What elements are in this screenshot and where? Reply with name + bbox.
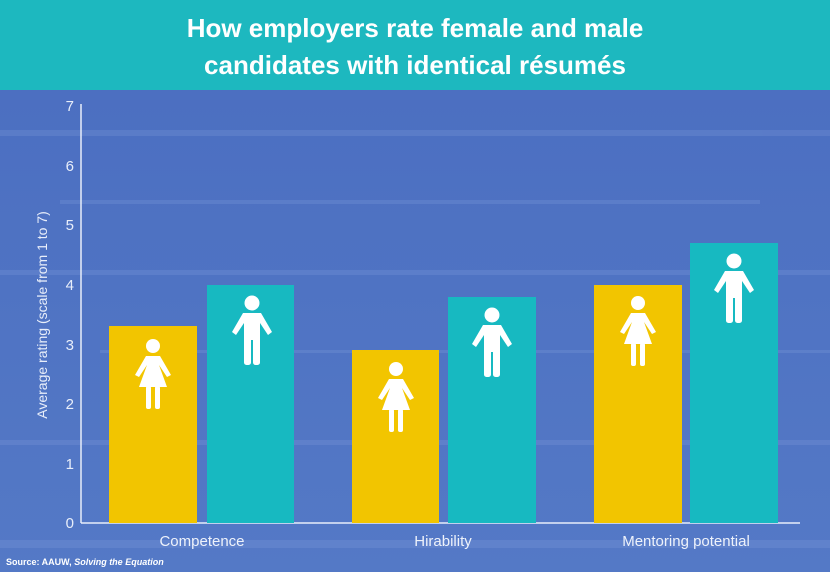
x labels: Hirability <box>414 533 472 550</box>
y axis: 1 <box>66 456 74 473</box>
y axis: 5 <box>66 217 74 234</box>
bars: competence <box>109 285 294 523</box>
y axis: 4 <box>66 277 74 294</box>
y axis: 6 <box>66 158 74 175</box>
y axis: 7 <box>66 98 74 115</box>
x labels: Competence <box>159 533 245 550</box>
y axis <box>34 98 800 532</box>
y axis: 0 <box>66 515 74 532</box>
x labels: Mentoring potential <box>622 533 750 550</box>
y axis: 3 <box>66 337 74 354</box>
y axis: Average rating (scale from 1 to 7) <box>34 211 50 419</box>
bars: mentoring <box>594 243 778 523</box>
title band: candidates with identical résumés <box>204 50 626 80</box>
source: Source: AAUW, Solving the Equation <box>6 557 164 567</box>
y axis: 2 <box>66 396 74 413</box>
bars: hirability <box>352 297 536 523</box>
x labels <box>159 533 750 550</box>
title band <box>0 0 830 90</box>
title band: How employers rate female and male <box>187 13 643 43</box>
